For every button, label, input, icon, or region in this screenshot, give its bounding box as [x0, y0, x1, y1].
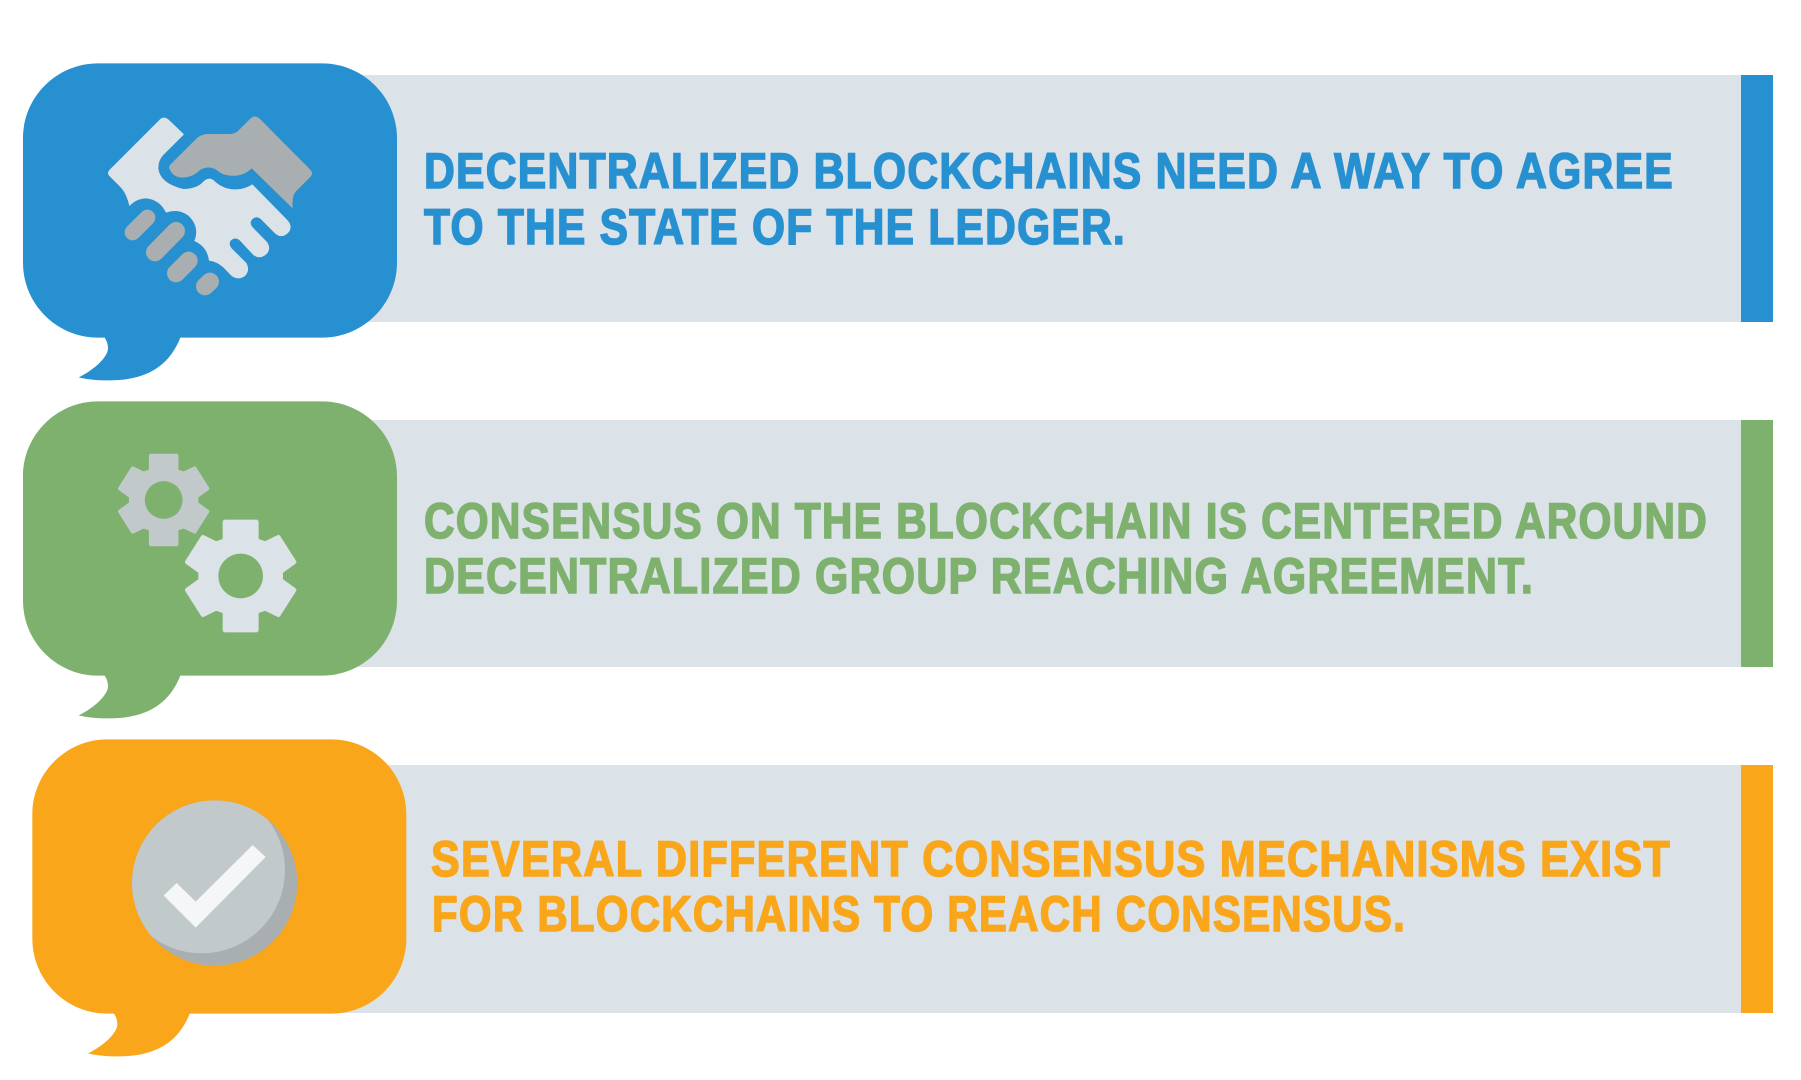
accent bar: row 2 — [1741, 420, 1773, 667]
text: row 3 statement: FOR BLOCKCHAINS TO REACH CONSENSUS. — [432, 885, 1406, 942]
icon: gears — [120, 456, 294, 630]
panel: row 3 background — [340, 765, 1741, 1013]
text: row 2 statement: DECENTRALIZED GROUP REACHING AGREEMENT. — [424, 547, 1534, 604]
panel: row 1 background — [340, 75, 1741, 322]
speech bubble: blue with handshake icon — [23, 63, 397, 380]
text: row 2 statement — [424, 492, 1708, 604]
accent bar: row 3 — [1741, 765, 1773, 1013]
panel: row 2 background — [340, 420, 1741, 667]
text: row 3 statement — [431, 830, 1671, 942]
icon: check mark badge — [132, 800, 298, 966]
text: row 1 statement — [424, 142, 1674, 255]
text: row 1 statement: TO THE STATE OF THE LEDGER. — [424, 198, 1126, 255]
icon: handshake — [108, 116, 312, 286]
speech bubble: green with gears icon — [23, 401, 397, 718]
speech bubble: orange with check icon — [32, 739, 406, 1056]
accent bar: row 1 — [1741, 75, 1773, 322]
